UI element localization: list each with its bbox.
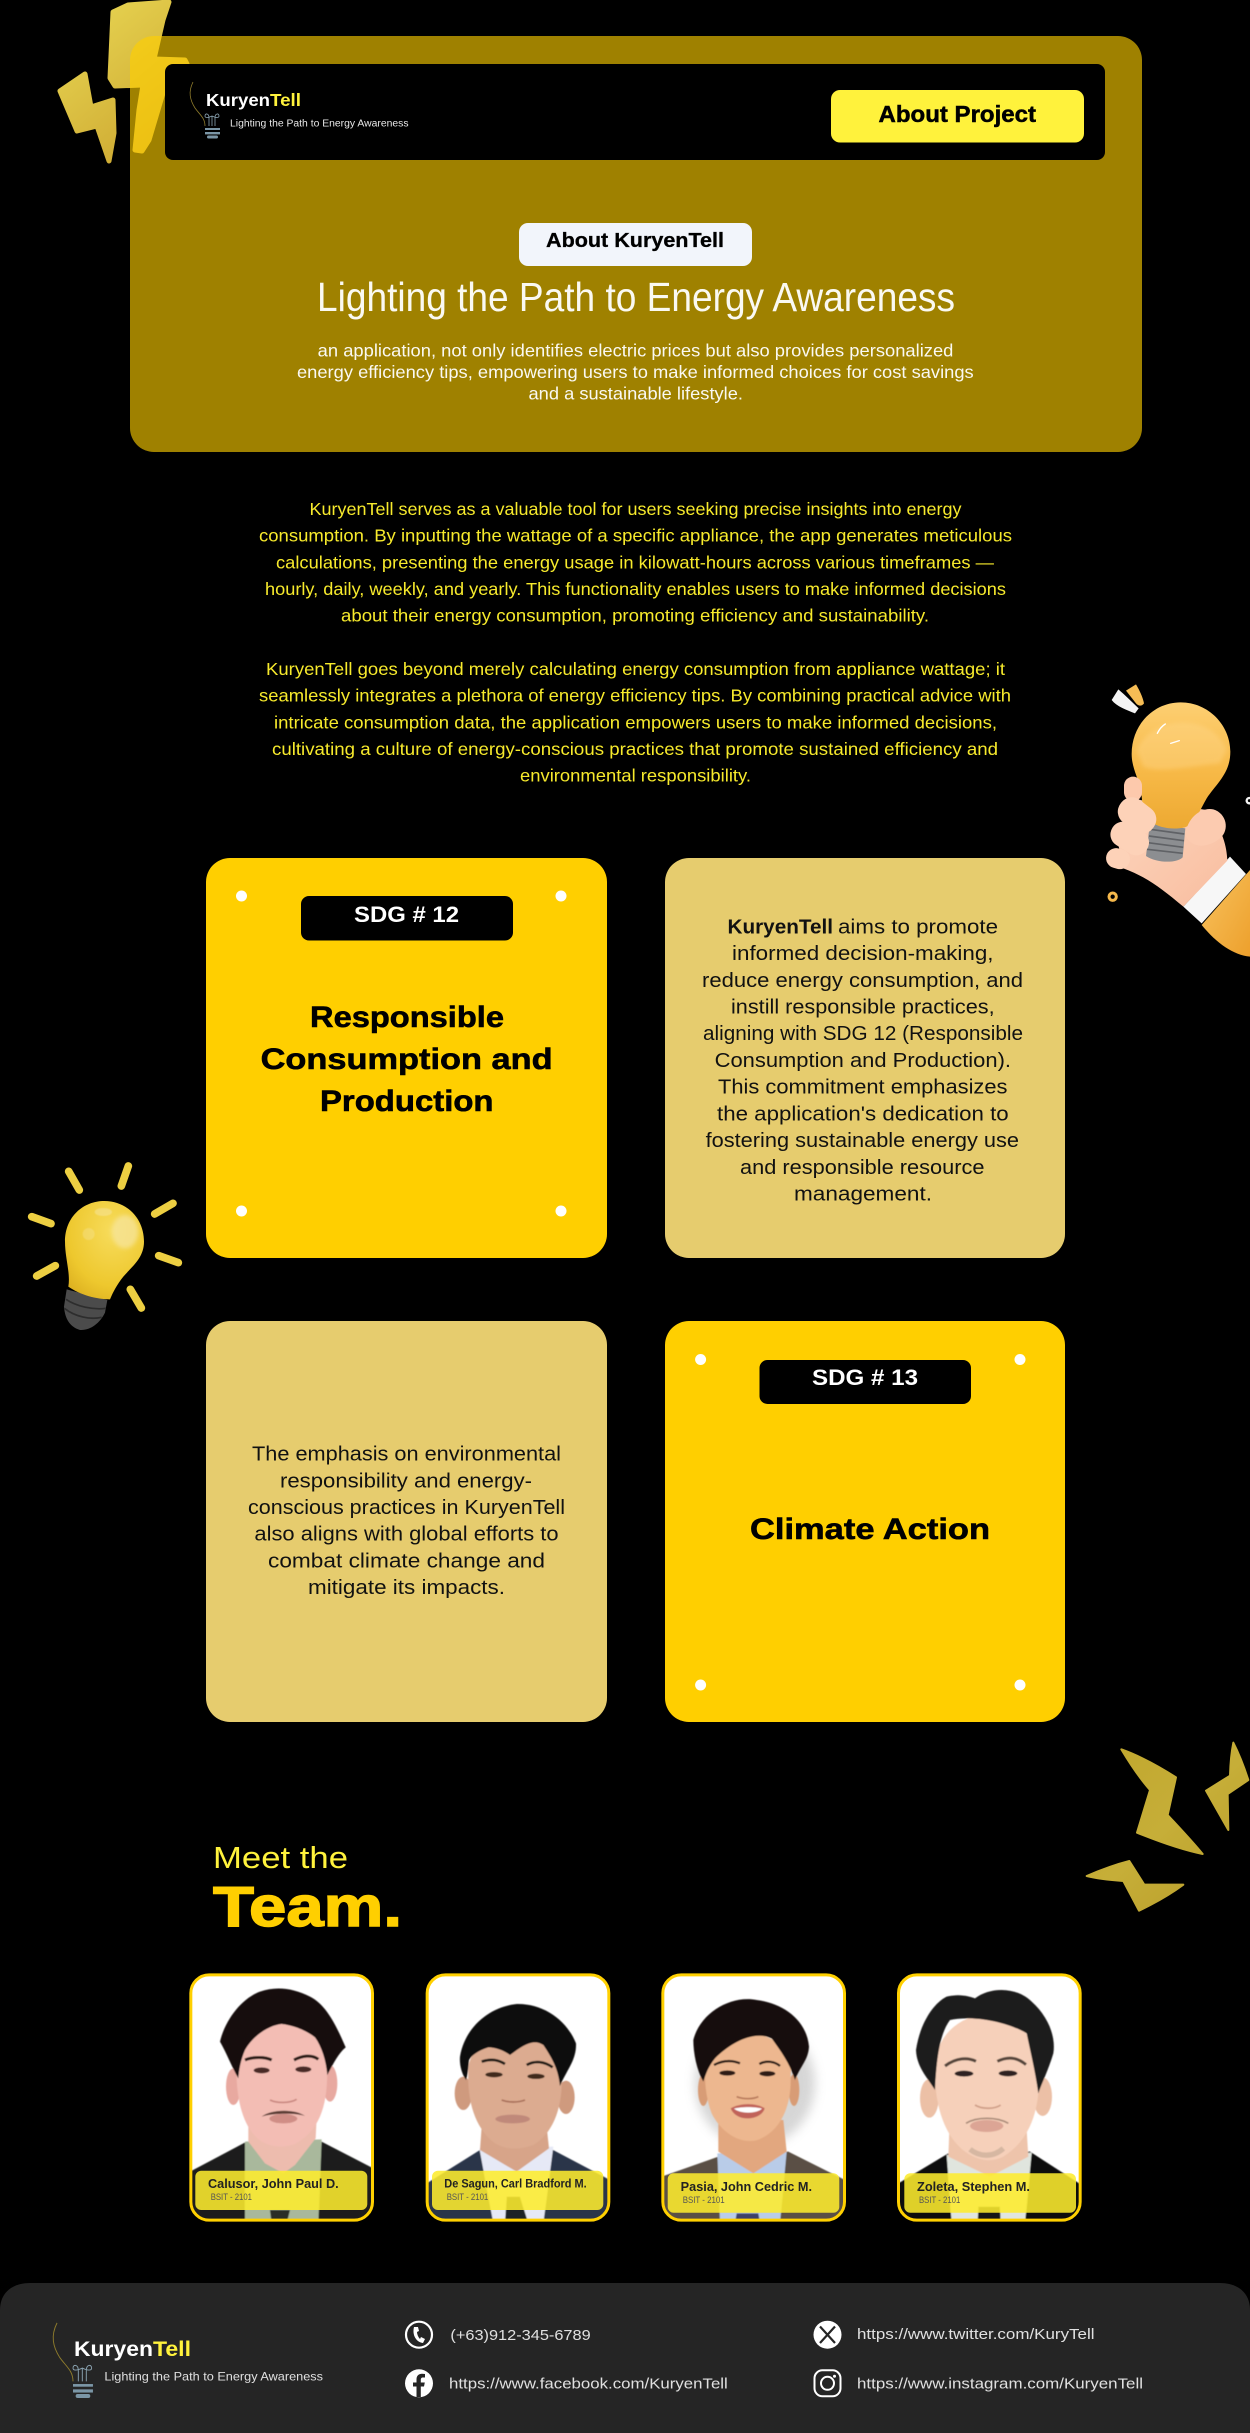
name label: Pasia: [668, 2173, 839, 2213]
contact: twitter: [814, 2321, 1094, 2349]
hero description: an application, not only identifies electric prices but also provides personalized: [318, 341, 953, 361]
label: SDG # 13: [760, 1360, 971, 1404]
name label: Zoleta: BSIT - 2101: [919, 2195, 960, 2205]
heading: Meet the Team: Team.: [213, 1875, 402, 1939]
SDG 12 paragraph: reduce energy consumption, and: [702, 970, 1023, 992]
label: SDG # 13: SDG # 13: [812, 1365, 918, 1390]
icon: glowing light bulb: [32, 1166, 178, 1330]
SDG 12 paragraph: management.: [794, 1184, 932, 1206]
footer logo: Lighting the Path to Energy Awareness: [104, 2370, 323, 2384]
contact: facebook: [405, 2369, 728, 2397]
panel: SDG 12 explanation: [665, 858, 1065, 1258]
contact: phone: [406, 2322, 591, 2348]
heading: Meet the Team: Meet the: [213, 1840, 348, 1875]
panel: hero: [130, 36, 1142, 452]
text block: description: seamlessly integrates a plethora of energy efficiency tips. By combining practical advice with: [259, 686, 1011, 706]
SDG 13 paragraph: The emphasis on environmental: [252, 1444, 561, 1466]
heading: Responsible Consumption and Production: [261, 1001, 553, 1118]
panel: SDG 13 card: [665, 1321, 1065, 1722]
text block: description: [259, 499, 1012, 786]
heading: Responsible Consumption and Production: Production: [320, 1085, 494, 1118]
logo: KuryenTell: Lighting the Path to Energy Awareness: [230, 118, 408, 130]
SDG 12 paragraph: KuryenTell: [728, 916, 833, 938]
SDG 12 paragraph: aims to promote: [838, 916, 998, 938]
heading: Climate Action: Climate Action: [750, 1513, 990, 1546]
footer logo: Tell: [153, 2338, 191, 2361]
name label: Calusor: [195, 2171, 367, 2210]
SDG 12 paragraph: and responsible resource: [740, 1157, 984, 1179]
hero description: [297, 341, 974, 404]
logo: KuryenTell: Kuryen: [206, 90, 270, 110]
text block: description: calculations, presenting the energy usage in kilowatt-hours across various timeframes —: [276, 552, 995, 572]
navigation bar: [165, 64, 1105, 160]
heading: Responsible Consumption and Production: Responsible: [310, 1001, 504, 1034]
portrait: De Sagun: [427, 1975, 610, 2223]
team card: Pasia: [662, 1975, 845, 2223]
SDG 13 paragraph: mitigate its impacts.: [308, 1577, 505, 1599]
label: SDG # 12: [301, 896, 513, 940]
SDG 13 paragraph: responsibility and energy-: [280, 1470, 532, 1492]
SDG 13 paragraph: combat climate change and: [268, 1550, 545, 1572]
SDG 12 paragraph: This commitment emphasizes: [718, 1077, 1008, 1099]
contact: instagram: [814, 2370, 1143, 2396]
panel: SDG 12 card: [206, 858, 607, 1258]
hero heading: Lighting the Path to Energy Awareness: [317, 274, 955, 320]
button: About Project: About Project: [878, 101, 1036, 127]
team card: De Sagun: [427, 1975, 610, 2223]
name label: De Sagun: De Sagun, Carl Bradford M.: [444, 2176, 587, 2190]
text block: description: hourly, daily, weekly, and yearly. This functionality enables users to make informed decisions: [265, 579, 1006, 599]
contact: phone: (+63)912-345-6789: [450, 2327, 591, 2344]
SDG 12 paragraph: aligning with SDG 12 (Responsible: [703, 1023, 1023, 1045]
text block: description: about their energy consumption, promoting efficiency and sustainability.: [341, 606, 929, 626]
icon: hand holding light bulb: [1104, 684, 1250, 957]
text block: description: KuryenTell goes beyond merely calculating energy consumption from appliance wattage; it: [266, 659, 1005, 679]
SDG 12 paragraph: [702, 916, 1023, 1206]
SDG 13 paragraph: [248, 1444, 565, 1599]
text block: description: KuryenTell serves as a valuable tool for users seeking precise insights into energy: [310, 499, 962, 519]
logo: KuryenTell: [190, 82, 408, 138]
label: About KuryenTell: About KuryenTell: [546, 230, 724, 252]
panel: footer: [0, 2283, 1250, 2433]
SDG 13 paragraph: conscious practices in KuryenTell: [248, 1497, 565, 1519]
name label: Zoleta: [904, 2173, 1076, 2213]
hero description: energy efficiency tips, empowering users to make informed choices for cost savings: [297, 362, 974, 382]
name label: Calusor: Calusor, John Paul D.: [208, 2177, 339, 2191]
logo: KuryenTell: Tell: [270, 90, 301, 110]
text block: description: environmental responsibility.: [520, 766, 751, 786]
SDG 13 paragraph: also aligns with global efforts to: [254, 1524, 559, 1546]
label: SDG # 12: SDG # 12: [354, 902, 459, 927]
contact: twitter: https://www.twitter.com/KuryTell: [857, 2326, 1094, 2343]
hero description: and a sustainable lifestyle.: [528, 384, 743, 404]
icon: lightning bolts right: [1087, 1743, 1248, 1911]
text block: description: cultivating a culture of energy-conscious practices that promote sustained efficiency and: [272, 739, 998, 759]
name label: Calusor: BSIT - 2101: [211, 2192, 252, 2202]
panel: SDG 13 explanation: [206, 1321, 607, 1722]
label: About KuryenTell: [519, 223, 752, 266]
team card: Zoleta: [898, 1975, 1082, 2223]
heading: Meet the Team: [213, 1840, 402, 1939]
contact: facebook: https://www.facebook.com/KuryenTell: [449, 2376, 728, 2393]
name label: Pasia: Pasia, John Cedric M.: [681, 2180, 812, 2194]
footer logo: Kuryen: [74, 2338, 153, 2361]
portrait: Zoleta: [898, 1975, 1082, 2223]
name label: Zoleta: Zoleta, Stephen M.: [917, 2180, 1030, 2194]
footer logo: [53, 2323, 323, 2398]
SDG 12 paragraph: Consumption and Production).: [715, 1050, 1011, 1072]
name label: De Sagun: [432, 2171, 603, 2210]
name label: De Sagun: BSIT - 2101: [447, 2192, 488, 2202]
team card: Calusor: [190, 1975, 373, 2223]
heading: Responsible Consumption and Production: Consumption and: [261, 1043, 553, 1076]
portrait: Pasia: [662, 1975, 845, 2223]
text block: description: consumption. By inputting the wattage of a specific appliance, the app generates meticulous: [259, 526, 1012, 546]
SDG 12 paragraph: the application's dedication to: [717, 1103, 1009, 1125]
button: About Project: [831, 90, 1084, 142]
text block: description: intricate consumption data, the application empowers users to make informed decisions,: [274, 712, 997, 732]
contact: instagram: https://www.instagram.com/KuryenTell: [857, 2376, 1143, 2393]
icon: lightning bolts top left: [60, 2, 187, 161]
SDG 12 paragraph: instill responsible practices,: [731, 996, 995, 1018]
portrait: Calusor: [190, 1975, 373, 2223]
SDG 12 paragraph: informed decision-making,: [732, 943, 994, 965]
SDG 12 paragraph: fostering sustainable energy use: [706, 1130, 1019, 1152]
name label: Pasia: BSIT - 2101: [683, 2195, 725, 2205]
